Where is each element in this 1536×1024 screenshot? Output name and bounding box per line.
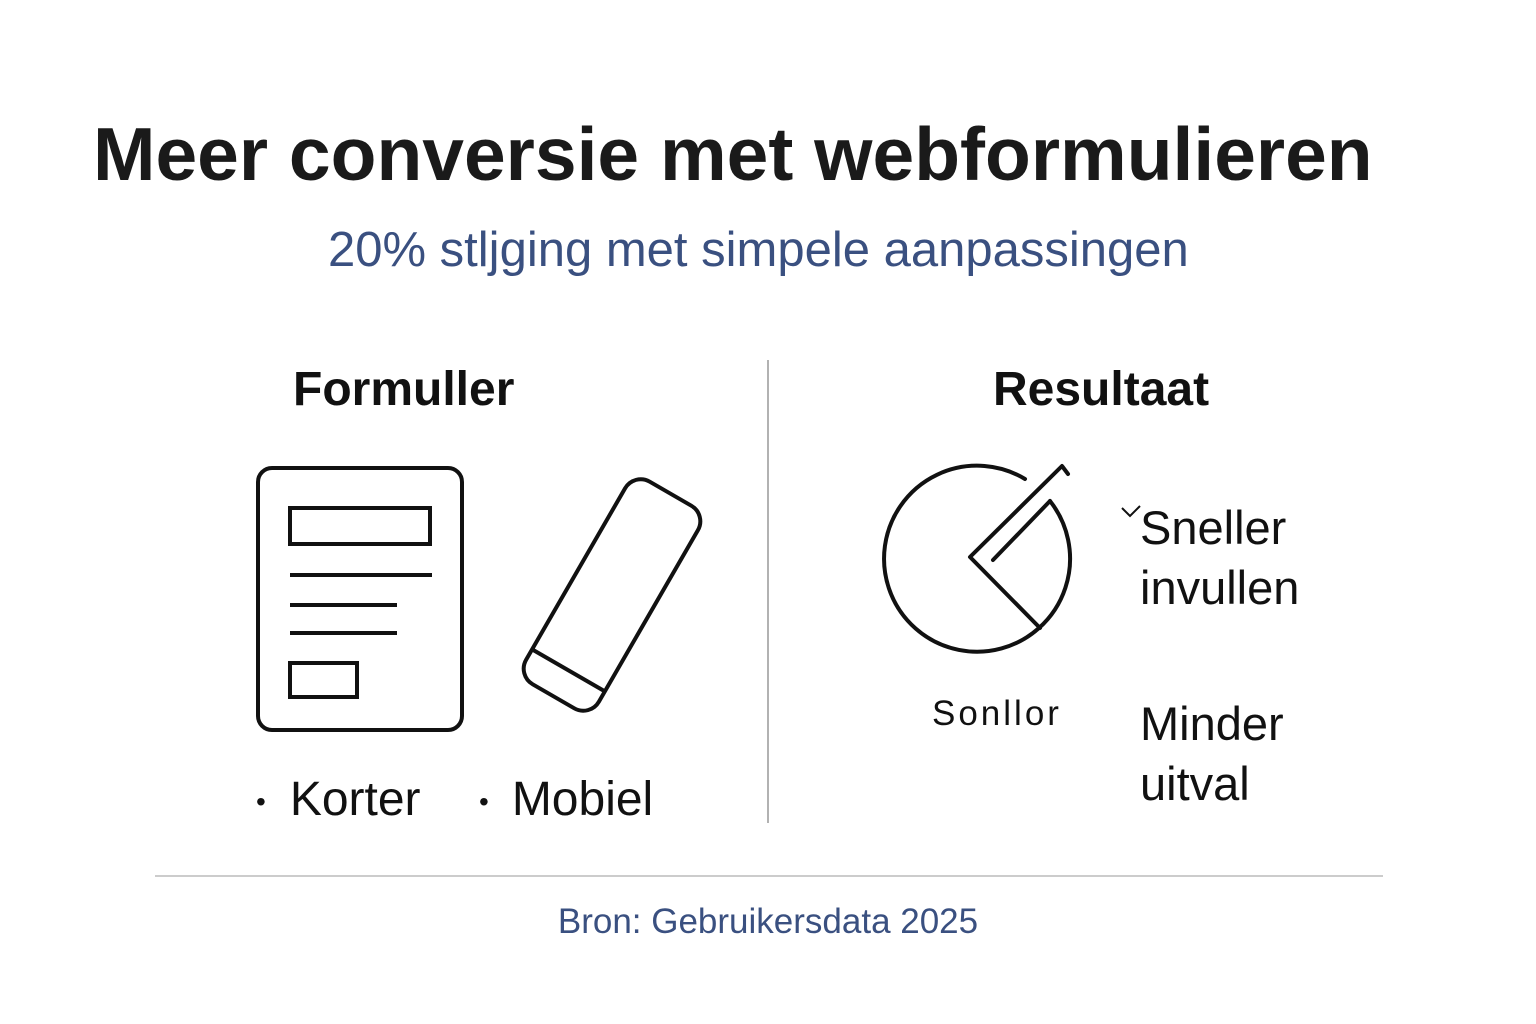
title: Meer conversie met webformulieren (93, 112, 1373, 196)
text: Sneller invullen: Sneller (1140, 501, 1286, 554)
bullet: Korter: • Korter (256, 773, 421, 826)
bullet: Mobiel: • Mobiel (479, 773, 653, 826)
heading: Formuller: Formuller (293, 363, 514, 416)
icon: pie chart (884, 466, 1070, 652)
text: Sneller invullen: invullen (1140, 561, 1299, 614)
icon: checkmark (1122, 506, 1140, 516)
text: Minder uitval (1140, 697, 1284, 810)
text: Sneller invullen (1140, 501, 1299, 614)
icon: form document (258, 468, 462, 730)
subtitle: 20% stljging met simpele aanpassingen (328, 223, 1189, 277)
text: garbled label: Sonllor (932, 694, 1062, 733)
heading: Resultaat: Resultaat (993, 363, 1209, 416)
source: Bron: Gebruikersdata 2025 (558, 902, 978, 941)
text: Minder uitval: Minder (1140, 697, 1284, 750)
text: Minder uitval: uitval (1140, 757, 1250, 810)
icon: mobile phone (517, 473, 707, 717)
